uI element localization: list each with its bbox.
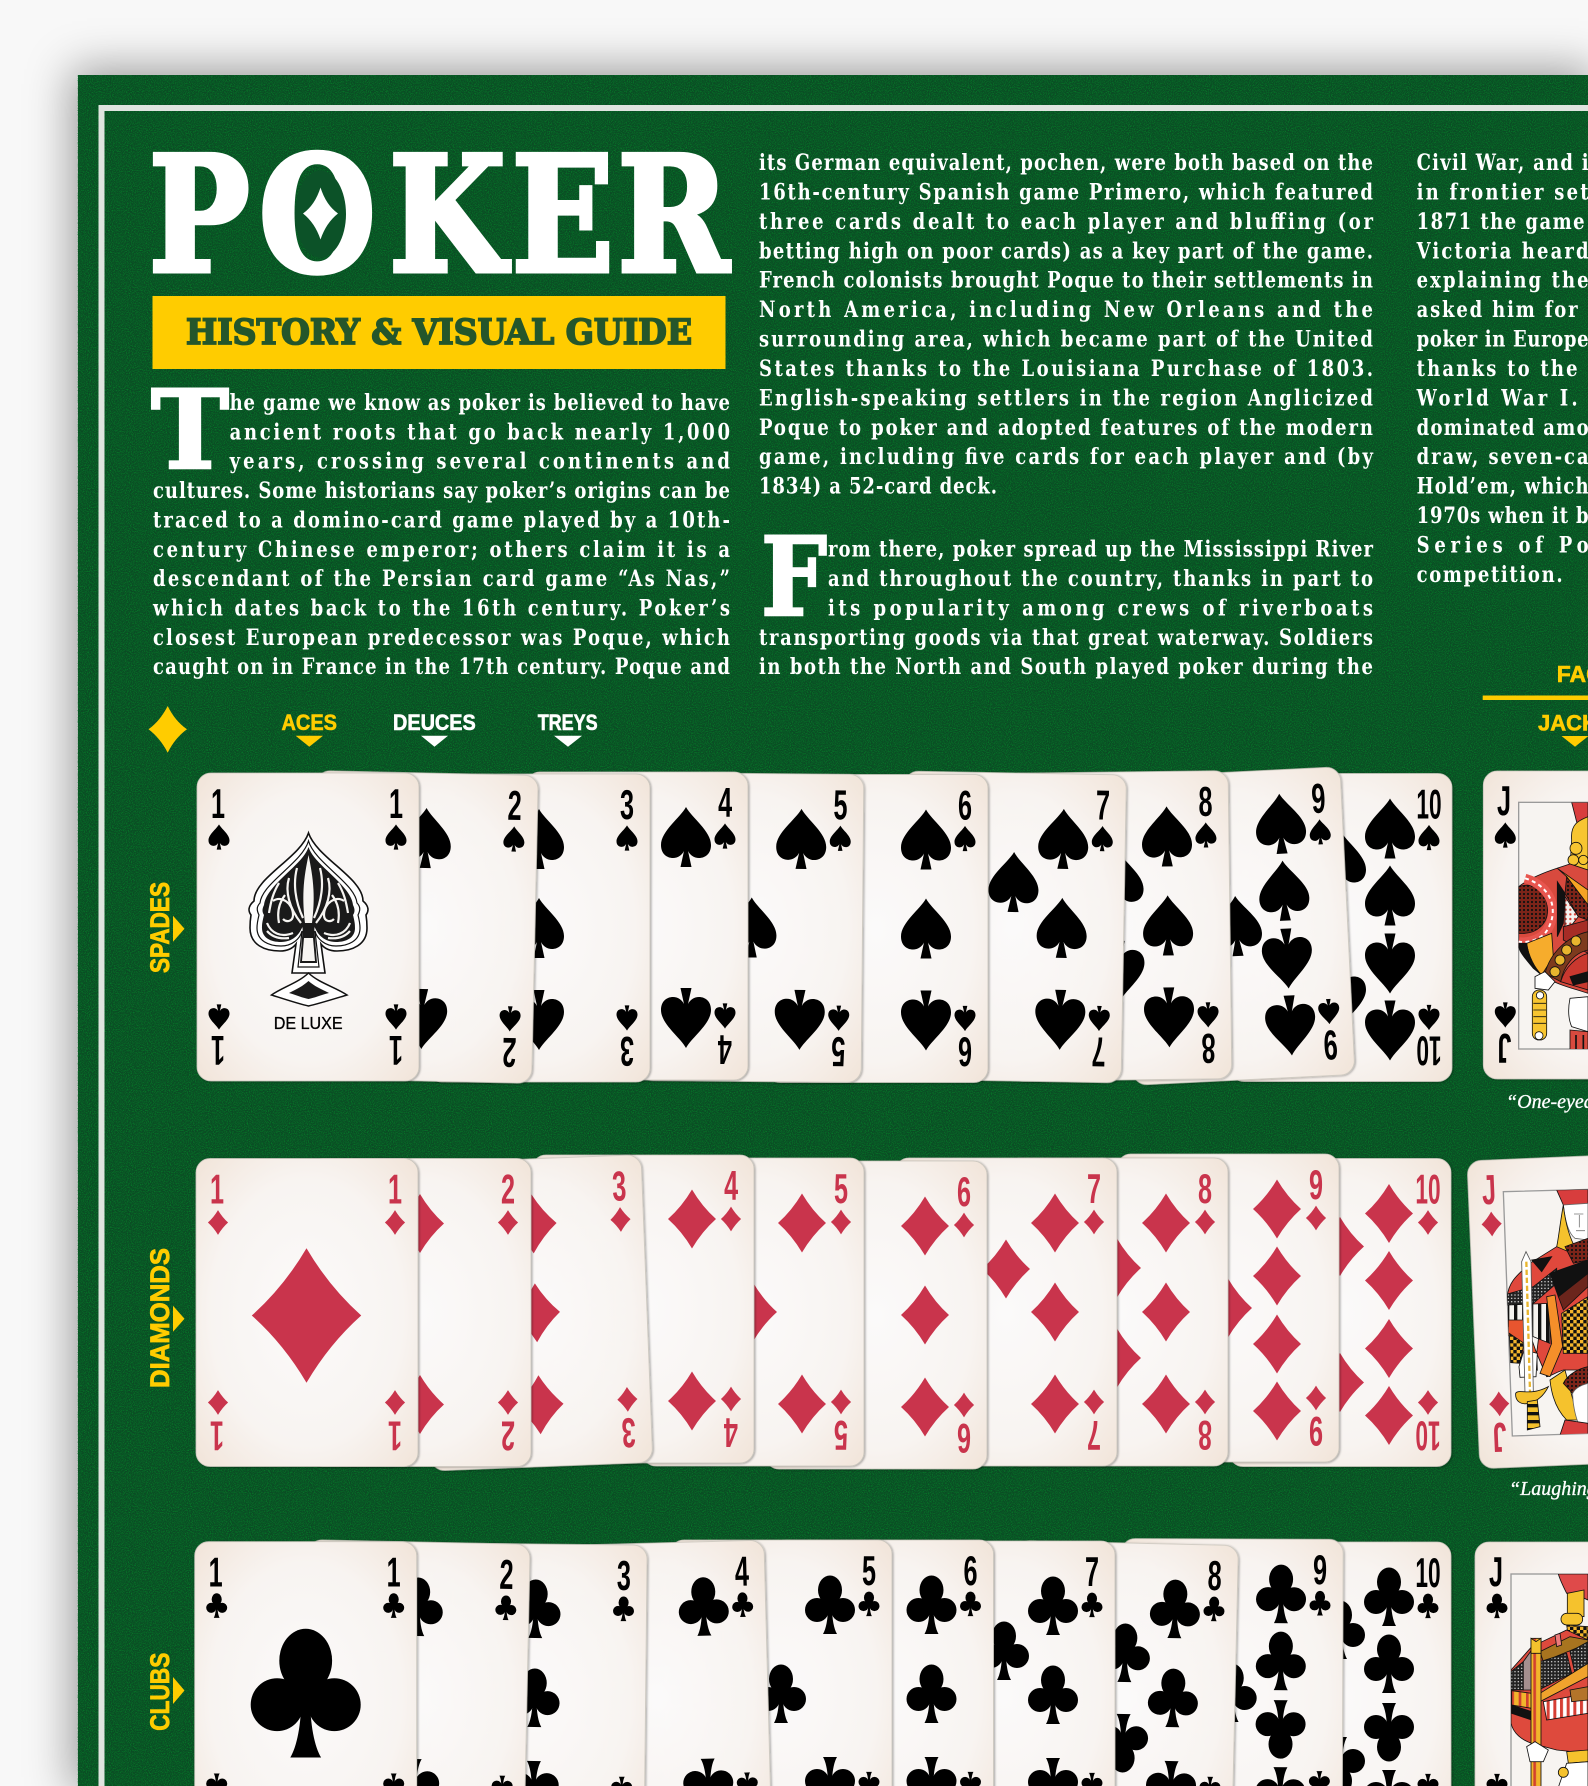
illustration: jack of diamonds figure bbox=[1503, 1189, 1588, 1436]
card: 7 of diamonds bbox=[895, 1158, 1117, 1466]
card: 5 of spades: 5 bbox=[831, 1028, 846, 1074]
intro text column 1: years, crossing several continents and bbox=[229, 448, 730, 474]
card: 2 of diamonds bbox=[309, 1158, 531, 1466]
card: 6 of spades bbox=[766, 774, 988, 1082]
card: 10 of spades: 10 bbox=[1416, 781, 1442, 828]
history text column 3 (runs off page): asked him for bbox=[1417, 296, 1578, 323]
card: 3 of spades bbox=[428, 774, 650, 1082]
history text column 3 (runs off page): Victoria heard bbox=[1416, 237, 1588, 264]
card: 8 of spades bbox=[1006, 771, 1232, 1081]
card: 6 of clubs bbox=[772, 1540, 994, 1786]
history text column 3 (runs off page): draw, seven-ca bbox=[1417, 443, 1588, 470]
card: 4 of spades bbox=[526, 772, 748, 1080]
history text column 2: its German equivalent, pochen, were both based on the bbox=[759, 149, 1373, 176]
card: 8 of diamonds bbox=[1006, 1158, 1228, 1466]
column header: deuces bbox=[393, 710, 476, 747]
history text column 2: States thanks to the Louisiana Purchase of 1803. bbox=[759, 355, 1373, 381]
card: 6 of spades: 6 bbox=[958, 1028, 972, 1074]
card: ace of spades: 1 bbox=[211, 782, 225, 828]
card: 5 of diamonds bbox=[642, 1158, 864, 1466]
card: ace of clubs bbox=[195, 1542, 417, 1786]
card: 2 of diamonds: 2 bbox=[501, 1412, 515, 1458]
card: 9 of spades: 9 bbox=[1322, 1021, 1339, 1067]
history text column 2: English-speaking settlers in the region Anglicized bbox=[759, 384, 1373, 411]
card: 10 of diamonds: 10 bbox=[1415, 1412, 1441, 1459]
card: 3 of spades: 3 bbox=[620, 1027, 634, 1073]
card: 4 of spades: 4 bbox=[718, 781, 733, 827]
card: 8 of diamonds: 8 bbox=[1198, 1167, 1212, 1213]
history text column 2 bbox=[759, 149, 1374, 680]
card: ace of clubs: 1 bbox=[387, 1550, 401, 1596]
card: 8 of clubs: 8 bbox=[1207, 1553, 1222, 1600]
row label: clubs bbox=[145, 1653, 184, 1731]
card: 2 of clubs: 2 bbox=[499, 1552, 514, 1599]
history text column 2: transporting goods via that great waterway. Soldiers bbox=[759, 624, 1373, 651]
drop cap F: F bbox=[761, 513, 827, 641]
card: 7 of clubs bbox=[893, 1541, 1115, 1786]
column header: face cards bbox=[1483, 661, 1588, 700]
card: 2 of spades: 2 bbox=[502, 1028, 517, 1074]
card: 5 of spades: 5 bbox=[833, 783, 848, 829]
card: 5 of spades bbox=[639, 773, 864, 1082]
history text column 2: its popularity among crews of riverboats bbox=[828, 594, 1373, 621]
card: ace of diamonds bbox=[196, 1158, 418, 1466]
column header: aces: ACES bbox=[282, 710, 337, 735]
card: 5 of diamonds: 5 bbox=[834, 1411, 848, 1457]
card: 8 of spades: 8 bbox=[1201, 1024, 1216, 1070]
card: ace of diamonds: 1 bbox=[210, 1167, 224, 1213]
row: spades cards bbox=[197, 767, 1452, 1085]
row label: spades: SPADES bbox=[145, 882, 175, 973]
history text column 3 (runs off page): in frontier set bbox=[1417, 178, 1588, 205]
history text column 2: Poque to poker and adopted features of the modern bbox=[759, 414, 1373, 440]
intro text column 1: ancient roots that go back nearly 1,000 bbox=[230, 418, 730, 445]
card: 9 of spades: 9 bbox=[1310, 776, 1327, 823]
history text column 3 (runs off page): explaining the bbox=[1417, 267, 1588, 293]
card: 3 of clubs bbox=[422, 1543, 647, 1786]
history text column 2: 1834) a 52-card deck. bbox=[759, 473, 997, 499]
card: ace of spades: 1 bbox=[389, 1026, 403, 1072]
card: jack of spades: J bbox=[1497, 779, 1511, 825]
card: 10 of spades: 10 bbox=[1416, 1027, 1442, 1074]
history text column 3 (runs off page): 1970s when it b bbox=[1417, 502, 1588, 529]
card: ace of diamonds: 1 bbox=[388, 1167, 402, 1213]
card: jack of diamonds: J bbox=[1492, 1413, 1508, 1460]
card: ace of diamonds: 1 bbox=[210, 1412, 224, 1458]
intro text column 1: descendant of the Persian card game “As Nas,” bbox=[153, 565, 730, 592]
icon: yellow diamond bbox=[148, 706, 187, 753]
history text column 2: in both the North and South played poker during the bbox=[759, 653, 1373, 680]
card: 6 of clubs: 6 bbox=[963, 1549, 978, 1595]
card: 9 of diamonds: 9 bbox=[1309, 1163, 1323, 1209]
title: POKER: POKER bbox=[149, 120, 730, 309]
row: diamonds cards bbox=[196, 1154, 1451, 1471]
intro text column 1 bbox=[152, 389, 730, 680]
row label: spades bbox=[145, 882, 184, 973]
history text column 2: rom there, poker spread up the Mississippi River bbox=[828, 536, 1373, 562]
card: 8 of diamonds: 8 bbox=[1198, 1411, 1212, 1457]
card: 2 of clubs bbox=[302, 1540, 530, 1786]
history text column 3 (runs off page): Series of Po bbox=[1417, 531, 1588, 558]
card: 3 of diamonds bbox=[419, 1155, 653, 1471]
card: jack of diamonds: J bbox=[1481, 1167, 1497, 1214]
history text column 2: and throughout the country, thanks in part to bbox=[828, 565, 1373, 592]
card: ace of spades bbox=[197, 773, 419, 1081]
card: 9 of diamonds bbox=[1117, 1154, 1339, 1462]
card: 7 of spades bbox=[899, 771, 1126, 1083]
card: jack of clubs bbox=[1475, 1542, 1588, 1786]
history text column 3 (runs off page): Civil War, and i bbox=[1417, 149, 1588, 176]
subtitle banner bbox=[152, 296, 726, 369]
card: 4 of clubs: 4 bbox=[734, 1549, 750, 1596]
card: 2 of diamonds: 2 bbox=[501, 1167, 515, 1213]
card: 10 of diamonds: 10 bbox=[1415, 1166, 1441, 1213]
label: de luxe: DE LUXE bbox=[274, 1013, 343, 1033]
illustration: jack of clubs figure bbox=[1511, 1574, 1588, 1786]
history text column 2: 16th-century Spanish game Primero, which featured bbox=[759, 178, 1373, 205]
card: 6 of diamonds bbox=[765, 1161, 987, 1469]
history text column 3 (runs off page): thanks to the bbox=[1417, 355, 1578, 381]
intro text column 1: century Chinese emperor; others claim it is a bbox=[153, 536, 730, 562]
history text column 3 (runs off page): competition. bbox=[1417, 561, 1563, 587]
card: 7 of diamonds: 7 bbox=[1087, 1411, 1101, 1457]
column header: jacks bbox=[1538, 710, 1588, 747]
card: 6 of diamonds: 6 bbox=[957, 1414, 971, 1460]
intro text column 1: which dates back to the 16th century. Poker’s bbox=[152, 595, 730, 621]
card: 5 of clubs bbox=[670, 1540, 892, 1786]
row label: diamonds: DIAMONDS bbox=[145, 1248, 175, 1388]
intro text column 1: traced to a domino-card game played by a 10th- bbox=[153, 506, 730, 533]
card: 3 of diamonds: 3 bbox=[621, 1408, 637, 1455]
card: 3 of diamonds: 3 bbox=[611, 1164, 627, 1210]
card: ace of spades: 1 bbox=[389, 782, 403, 828]
card: ace of diamonds: 1 bbox=[388, 1412, 402, 1458]
intro text column 1: cultures. Some historians say poker’s origins can be bbox=[153, 477, 730, 504]
card: ace of spades: 1 bbox=[211, 1026, 225, 1072]
history text column 3 (runs off page): poker in Europe bbox=[1417, 326, 1588, 352]
history text column 2: three cards dealt to each player and bluffing (or bbox=[759, 208, 1373, 234]
column header: treys: TREYS bbox=[538, 710, 598, 735]
card: 8 of clubs bbox=[1010, 1541, 1238, 1786]
column header: deuces: DEUCES bbox=[393, 710, 476, 735]
card: 10 of clubs: 10 bbox=[1415, 1550, 1441, 1597]
card: ace of clubs: 1 bbox=[209, 1550, 223, 1596]
card: 6 of diamonds: 6 bbox=[957, 1170, 971, 1216]
icon: spade base ornament bbox=[272, 973, 347, 1006]
card: 8 of spades: 8 bbox=[1198, 779, 1213, 826]
intro text column 1: caught on in France in the 17th century. Poque and bbox=[153, 653, 730, 680]
card: 5 of clubs: 5 bbox=[862, 1549, 876, 1595]
card: 6 of spades: 6 bbox=[958, 783, 972, 829]
card: 2 of spades bbox=[310, 771, 538, 1083]
card: 4 of diamonds: 4 bbox=[723, 1408, 738, 1454]
card: jack of diamonds bbox=[1467, 1152, 1588, 1469]
card: 7 of spades: 7 bbox=[1096, 783, 1110, 829]
card: 7 of spades: 7 bbox=[1091, 1028, 1106, 1074]
history text column 3 (runs off page) bbox=[1416, 149, 1588, 587]
history text column 2: surrounding area, which became part of the United bbox=[759, 326, 1373, 352]
history text column 3 (runs off page): World War I. bbox=[1416, 384, 1578, 411]
history text column 3 (runs off page): Hold’em, which bbox=[1417, 473, 1588, 499]
column header: aces bbox=[282, 710, 337, 747]
card: 10 of spades bbox=[1230, 774, 1452, 1082]
history text column 2: French colonists brought Poque to their settlements in bbox=[759, 267, 1373, 293]
subtitle banner: HISTORY & VISUAL GUIDE bbox=[186, 313, 692, 353]
card: 10 of clubs bbox=[1229, 1542, 1451, 1786]
card: 2 of spades: 2 bbox=[507, 783, 522, 830]
card: jack of clubs: J bbox=[1489, 1550, 1503, 1596]
card: jack of spades bbox=[1483, 771, 1588, 1079]
card: 9 of spades bbox=[1118, 767, 1355, 1085]
card: 4 of clubs bbox=[542, 1540, 772, 1786]
card: 9 of clubs bbox=[1120, 1539, 1343, 1786]
row label: clubs: CLUBS bbox=[145, 1653, 175, 1731]
card: 4 of diamonds: 4 bbox=[724, 1164, 739, 1210]
card: 10 of diamonds bbox=[1229, 1158, 1451, 1466]
history text column 3 (runs off page): 1871 the game bbox=[1417, 208, 1585, 234]
illustration: jack of spades figure bbox=[1519, 802, 1588, 1050]
card: 3 of spades: 3 bbox=[620, 783, 634, 829]
card: 3 of clubs: 3 bbox=[617, 1553, 631, 1600]
history text column 2: game, including five cards for each player and (by bbox=[759, 443, 1374, 470]
row: clubs cards bbox=[195, 1539, 1451, 1786]
card: 4 of diamonds bbox=[532, 1155, 754, 1463]
card: 7 of diamonds: 7 bbox=[1087, 1167, 1101, 1213]
history text column 2: betting high on poor cards) as a key part of the game. bbox=[759, 237, 1373, 264]
card: 9 of clubs: 9 bbox=[1313, 1548, 1327, 1594]
icon: ornate de luxe spade bbox=[249, 833, 368, 973]
card: 9 of diamonds: 9 bbox=[1309, 1407, 1323, 1453]
intro text column 1: he game we know as poker is believed to have bbox=[230, 389, 730, 416]
card: 7 of clubs: 7 bbox=[1085, 1550, 1099, 1596]
drop cap T: T bbox=[151, 366, 229, 494]
history text column 3 (runs off page): dominated amo bbox=[1417, 414, 1588, 440]
history text column 2: North America, including New Orleans and the bbox=[759, 296, 1373, 323]
column header: treys bbox=[538, 710, 598, 747]
intro text column 1: closest European predecessor was Poque, which bbox=[153, 624, 730, 650]
card: 4 of spades: 4 bbox=[717, 1025, 732, 1071]
card: jack of spades: J bbox=[1497, 1024, 1511, 1070]
card: 5 of diamonds: 5 bbox=[834, 1167, 848, 1213]
